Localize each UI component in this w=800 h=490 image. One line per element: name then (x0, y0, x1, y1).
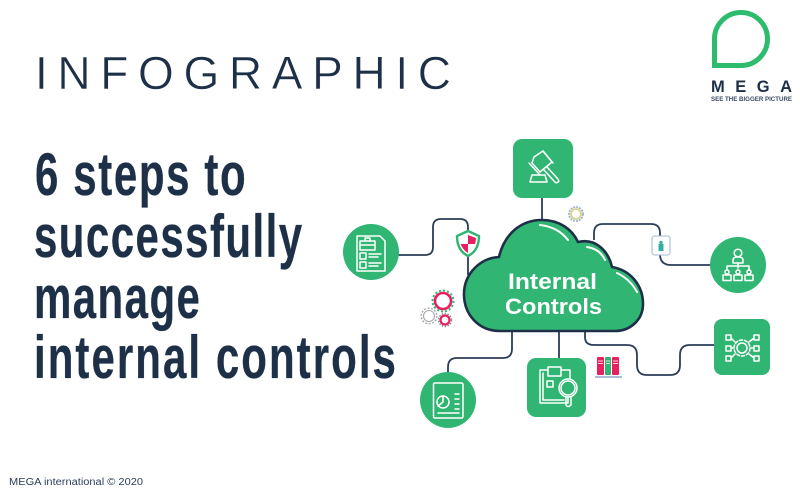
cloud: Internal Controls (464, 220, 643, 331)
connector: cloud to audit clipboard (558, 331, 560, 359)
footer: copyright: MEGA international © 2020 (9, 477, 143, 488)
main title (34, 141, 396, 391)
node: process gear (714, 319, 770, 375)
main title: internal controls (34, 324, 396, 391)
logo: MEGA: MEGA (711, 78, 792, 96)
node: compliance checklist (343, 224, 399, 280)
node: audit clipboard (527, 358, 586, 417)
cloud: Internal Controls: Controls (505, 294, 602, 319)
connector: cloud to process gear (585, 331, 714, 375)
icon: lock box (652, 236, 670, 255)
node: org chart (710, 237, 766, 293)
connector: cloud to report (448, 331, 512, 373)
icon: server racks (595, 357, 622, 377)
main title: successfully (34, 203, 302, 270)
cloud: Internal Controls: Internal (508, 269, 597, 294)
logo: MEGA (711, 12, 792, 103)
node: gavel (513, 139, 573, 198)
icon: small gear (569, 207, 583, 221)
icon: gears (421, 290, 454, 326)
main title: 6 steps to (35, 141, 246, 208)
main title: manage (34, 264, 200, 331)
kicker heading: INFOGRAPHIC: INFOGRAPHIC (35, 47, 451, 99)
connector: cloud to compliance checklist (398, 219, 468, 275)
connector: cloud to gavel (541, 198, 543, 220)
logo: MEGA: SEE THE BIGGER PICTURE (711, 96, 792, 103)
connector: cloud to org chart (594, 224, 711, 265)
node: report (420, 372, 476, 428)
icon: shield (457, 231, 479, 256)
